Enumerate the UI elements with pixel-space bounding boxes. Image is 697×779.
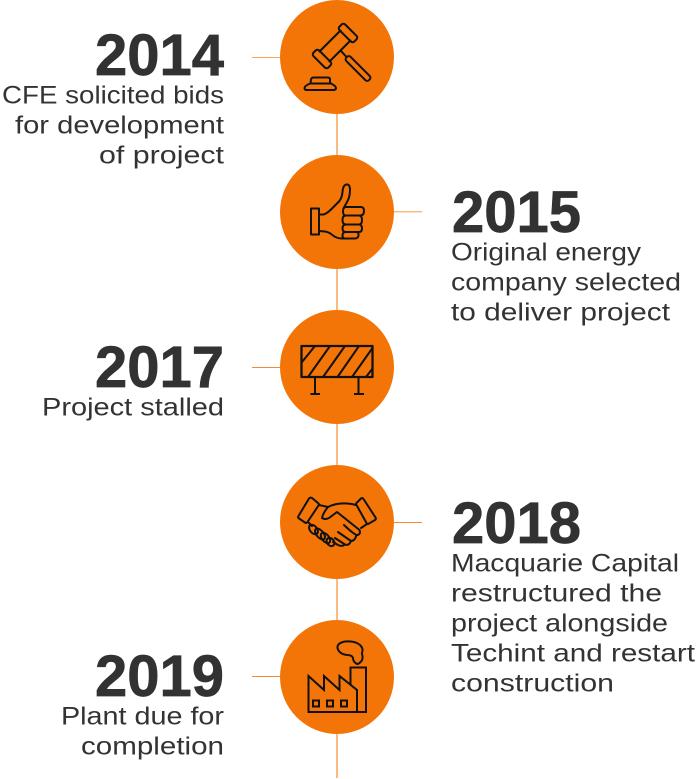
description: 2018: construction <box>451 670 614 698</box>
description: 2019 <box>61 702 224 760</box>
year: 2014: 2014 <box>95 23 224 88</box>
icon: road barrier <box>302 346 372 394</box>
timeline spine <box>336 0 338 778</box>
text block: 2017 <box>42 335 224 422</box>
description: 2015: Original energy <box>451 238 642 266</box>
description: 2018: project alongside <box>451 610 668 638</box>
icon: handshake <box>298 498 376 548</box>
description: 2019: Plant due for <box>61 702 224 730</box>
description: 2019: completion <box>81 732 224 760</box>
node: 2017 barrier <box>280 310 394 424</box>
node: 2019 factory <box>280 620 394 734</box>
connector: 2017 <box>252 367 281 368</box>
connector: 2019 <box>252 676 281 677</box>
node: 2014 gavel <box>280 0 394 114</box>
icon: factory <box>308 641 366 712</box>
text block: 2015 <box>451 180 681 326</box>
text block: 2019 <box>61 644 224 760</box>
year: 2018: 2018 <box>452 491 581 556</box>
node: 2015 thumbs up <box>280 155 394 269</box>
description: 2014: for development <box>15 112 224 140</box>
connector: 2014 <box>252 57 281 58</box>
description: 2014: CFE solicited bids <box>2 82 224 110</box>
description: 2014: of project <box>99 142 224 170</box>
description: 2018: Techint and restart <box>451 640 695 668</box>
description: 2017: Project stalled <box>42 394 224 422</box>
description: 2018 <box>451 550 695 698</box>
icon: gavel <box>304 23 371 90</box>
description: 2014 <box>2 82 224 170</box>
connector: 2015 <box>393 211 422 212</box>
description: 2018: Macquarie Capital <box>451 550 679 578</box>
year: 2017: 2017 <box>95 335 224 400</box>
year: 2015: 2015 <box>452 180 581 245</box>
description: 2015: to deliver project <box>451 298 670 326</box>
year: 2019: 2019 <box>95 644 224 709</box>
description: 2015 <box>451 238 681 326</box>
description: 2015: company selected <box>451 268 681 296</box>
icon: thumbs up <box>311 184 364 238</box>
text block: 2014 <box>2 23 224 170</box>
connector: 2018 <box>393 522 422 523</box>
node: 2018 handshake <box>280 465 394 579</box>
description: 2018: restructured the <box>451 580 662 608</box>
text block: 2018 <box>451 491 695 698</box>
